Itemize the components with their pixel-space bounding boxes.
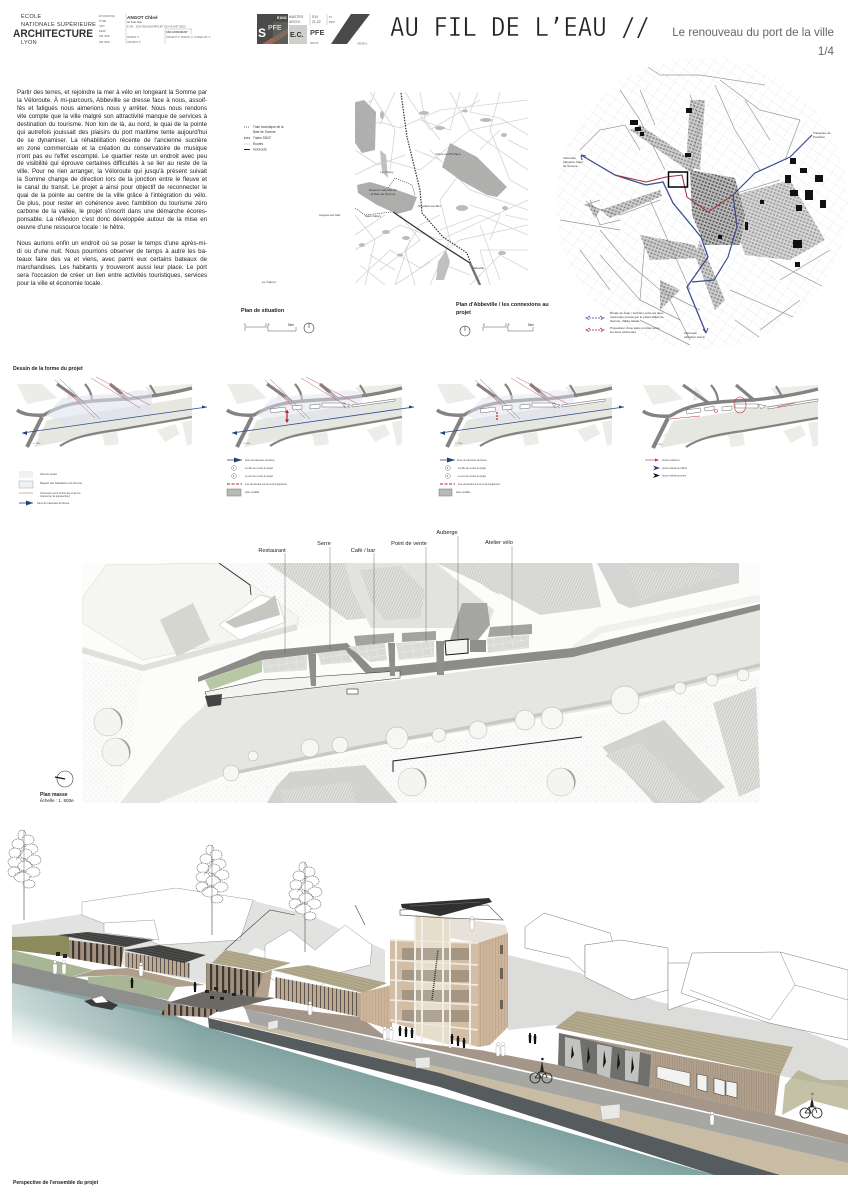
- atelier velo building: [555, 1011, 793, 1115]
- diagram 2 legend: [227, 458, 288, 496]
- white annex: [104, 920, 159, 940]
- text block: project description: teaux faire des va et viens, avec parmi eux certains bateaux de: [17, 256, 207, 263]
- header: project badge: PFE: [268, 25, 282, 32]
- path: [72, 968, 205, 987]
- header: student information: DIR./PAR: [99, 41, 110, 44]
- diagram 1 legend: Rapport des habitations à la Somme: [40, 481, 83, 485]
- plan masse labels: Auberge: [436, 530, 458, 536]
- legend: Abbeville map: Somme, Vallée Idéale.: [610, 319, 640, 323]
- text block: project description: la Véloroute. À mi-parcours, Abbeville se dresse face à nous, assoif-: [17, 97, 207, 104]
- text block: project description: la Somme change de direction lors de la jonction entre le fleuve et: [17, 176, 207, 183]
- diagram 2: 1 / 2000: [243, 443, 251, 445]
- diagram 4: [643, 385, 818, 448]
- trees: right bank path: [238, 665, 760, 772]
- header: student information: VINCENT. P, NOROS. K, CAPELLINI. N: [166, 36, 211, 39]
- pavilion 2: [124, 945, 206, 978]
- grey block: centre: [345, 563, 494, 628]
- header: project badge: 21-22: [312, 20, 321, 24]
- text block: project description: sera l'occasion de créer un lien entre activités touristiques, services: [17, 272, 207, 279]
- text block: project description: n'ont pas eu l'effet escompté. Le quartier reste un endroit avec peu: [17, 152, 207, 160]
- icon: north arrow situation: [304, 323, 314, 333]
- header: student information: DIR./PAR: [99, 35, 110, 38]
- grey terrain shadows: [12, 900, 385, 985]
- panel: situation map: Réserve naturelle de: [369, 188, 397, 192]
- diagram 1: [17, 377, 207, 447]
- diagram 1 legend: Aires du projet: [40, 472, 57, 476]
- stippled ground: [82, 563, 760, 803]
- text block: project description: quai de la pointe au centre de la ville grâce à l'intégration du vélo.: [17, 192, 207, 199]
- header: project badge: E.C.: [290, 32, 304, 39]
- subtitle: 1/4: [818, 45, 835, 58]
- panel: Abbeville map: (direction baie): [563, 160, 583, 164]
- scale bar: plan d'Abbeville: 5km: [528, 323, 534, 327]
- text block: project description: ponsable. La réflexion c'est donc développée autour de la mise en: [17, 216, 207, 223]
- diagram 1: 1 / 2000: [33, 443, 41, 445]
- diagram 3 legend: piste cyclable: [456, 491, 471, 494]
- situation map: outside labels: [262, 204, 441, 284]
- white background building: [82, 888, 253, 945]
- plan masse labels: [258, 530, 513, 654]
- planted garden: [205, 660, 262, 690]
- house C: [681, 952, 848, 1040]
- legend: situation map: [244, 125, 284, 152]
- text block: project description: qui autrefois jouissait des plaisirs du port maritime tente aujourd'hui: [17, 129, 207, 136]
- panel: Abbeville map: Véloroute: [563, 156, 576, 160]
- heading: dessin de la forme: Dessin de la forme du projet: [13, 366, 83, 372]
- text block: project description: marchandises. Les habitants y trouveront aussi leur place. Le port: [17, 264, 207, 271]
- trees: right bank: [223, 669, 749, 781]
- scale bar: plan de situation: 2,5: [265, 323, 270, 327]
- shadow: centre: [450, 603, 490, 640]
- house D roof detail: [690, 952, 848, 1020]
- legend: Abbeville map: véloroutes prévue par le projet Vallée de: [610, 315, 664, 319]
- diagram 3 legend: Le port au centre du projet: [458, 475, 486, 478]
- boat: [84, 996, 118, 1010]
- trees: lower right: [398, 768, 427, 796]
- panel: situation map: Le Crotoy: [380, 170, 394, 174]
- panel: perspective: [8, 830, 848, 1175]
- lawn 1: [12, 950, 93, 977]
- subtitle: [672, 26, 835, 58]
- header: student information: [99, 14, 211, 44]
- shadows behind the buildings: [354, 624, 532, 646]
- diagram 3 legend: 2: [447, 474, 449, 478]
- situation map: outside labels: Noyelles-sur-Mer: [418, 204, 441, 208]
- legend: Abbeville map: Ronde de l'eau / Jonction entre les deux: [610, 311, 664, 315]
- quay wall: [208, 1018, 780, 1175]
- diagram 2 legend: piste cyclable: [245, 491, 260, 494]
- wood deck: [240, 1003, 848, 1145]
- scale bar: plan de situation: 0: [244, 323, 246, 327]
- header: student information: Au fil de l'eau: [126, 21, 143, 24]
- diagram 3: 1 / 2000: [455, 443, 463, 445]
- text block: project description: destination du tourisme. Non loin de là, au nord, le quai de la pointe: [17, 121, 207, 128]
- text block: project description: [17, 89, 207, 286]
- text block: project description: en zone commerciale et la création du conservatoire de musique: [17, 145, 207, 152]
- panel: situation map: Abbeville: [472, 266, 484, 270]
- diagram 2 legend: Sens de traversée du fleuve: [245, 459, 275, 462]
- header: student information: E 041 - SOUTENANCE/PROJET DE FIN D'ÉTUDES: [127, 26, 186, 28]
- diagram 2: [227, 377, 414, 447]
- landing steps: [160, 1004, 220, 1017]
- heading: plan d'Abbeville: Plan d'Abbeville / les connexions au: [456, 302, 549, 308]
- text block: project description: Nous aurions enfin un endroit où se poser le temps d'une après-mi-: [17, 240, 207, 247]
- text block: project description: oeuvre d'une ressource locale : le hêtre.: [17, 224, 125, 231]
- plan masse labels: Serre: [317, 541, 331, 547]
- panel: Abbeville map: [556, 57, 848, 349]
- roofs: top right: [436, 563, 601, 615]
- plan masse labels: Point de vente: [391, 541, 427, 547]
- situation map: outside labels: Saint-Valery: [365, 214, 382, 218]
- house B: [585, 940, 668, 1000]
- header: project badge: MASTER: [289, 15, 304, 19]
- header: student information: ENCADREMENT: [166, 30, 188, 34]
- quay terrace: [205, 671, 400, 700]
- bottom centre block: [267, 765, 398, 803]
- header: student information: VINCENT. P: [127, 41, 141, 44]
- plan masse caption: [40, 792, 74, 803]
- legend: situation map: Baie de Somme: [253, 130, 276, 134]
- legend: Abbeville map: [586, 311, 664, 334]
- panel: Abbeville map: Véloroute: [684, 331, 697, 335]
- text block: project description: pour la ville et économie locale.: [17, 280, 102, 286]
- panel: situation map: [352, 92, 528, 285]
- text block: project description: De plus, pour rester en cohérence avec l'ambition du tourisme zéro: [17, 200, 207, 207]
- background mid houses: [265, 925, 372, 1000]
- scale bar: plan de situation: [244, 323, 296, 331]
- terrace tables: [56, 952, 243, 1000]
- header: school logo: ÉCOLE: [21, 13, 41, 20]
- plan masse labels: Atelier vélo: [485, 540, 513, 546]
- boats: [205, 694, 222, 707]
- header: project badge: FI: [329, 15, 332, 19]
- diagram 2 legend: Le port au centre du projet: [245, 475, 273, 478]
- panel: situation map: Crécy-en-Ponthieu: [435, 152, 461, 156]
- heading: plan d'Abbeville: projet: [456, 310, 471, 316]
- diagram 3: [437, 377, 624, 447]
- bottom right roofs: [605, 742, 700, 803]
- scale bar: plan d'Abbeville: 2,5: [505, 323, 510, 327]
- text block: project description: vite compte que la ville malgré son attractivité manque de services à: [17, 113, 207, 120]
- header: student information: RESP.: [99, 30, 106, 33]
- scale bar: plan d'Abbeville: 0: [483, 323, 485, 327]
- legend: situation map: Trains SNCF: [253, 136, 271, 140]
- diagram 3 legend: Axe structurant qui sert à la programme: [458, 483, 501, 486]
- heading: plan de situation: Plan de situation: [241, 308, 284, 314]
- text block: project description: le canal du transit. Le projet a ainsi pour objectif de reconnecter le: [17, 184, 207, 191]
- wall line: [393, 737, 582, 772]
- panel: situation map: la Baie de Somme: [371, 192, 396, 196]
- pavement strips: [308, 640, 486, 686]
- diagram 2 legend: La ville au centre du projet: [245, 467, 273, 470]
- text block: project description: de visibilité qui éprouve certaines difficultés à se lier au reste de la: [17, 160, 207, 167]
- situation map: outside labels: Cayeux-sur-Mer: [319, 213, 341, 217]
- header: school logo: [13, 13, 96, 46]
- lawn 2: [88, 975, 176, 1000]
- situation map: outside labels: Le Tréport: [262, 280, 276, 284]
- diagram 2 legend: Axe structurant qui sert à la programme: [245, 483, 288, 486]
- figures: [53, 916, 714, 1125]
- roof: auberge: [445, 639, 468, 655]
- diagram 4 legend: Accès extérieurs: [662, 459, 680, 462]
- roof: atelier velo: [487, 635, 529, 653]
- roof: restaurant: [262, 655, 307, 673]
- panel: Abbeville map: de Somme: [563, 164, 578, 168]
- legend: Abbeville map: les deux véloroutes: [610, 330, 636, 334]
- house small: [668, 963, 706, 1010]
- header: school logo: NATIONALE SUPÉRIEURE: [21, 21, 96, 28]
- scale bar: plan d'Abbeville: [483, 323, 534, 331]
- header: project badge: ©ENSAL: [357, 42, 368, 46]
- text block: project description: di ou d'une nuit. Nous pourrions observer de temps à autre les ba-: [17, 248, 207, 255]
- plan masse caption: Plan masse: [40, 792, 68, 798]
- diagram 3 legend: La ville au centre du projet: [458, 467, 486, 470]
- subtitle: Le renouveau du port de la ville: [672, 26, 834, 39]
- diagram 3 legend: 1: [447, 466, 449, 470]
- bank road: [570, 598, 760, 652]
- header: project badge: E1041: [277, 16, 287, 20]
- timber entry frame: [360, 985, 392, 1030]
- header: student information: ÉTUDIANT(E): [99, 15, 115, 18]
- water: [12, 983, 714, 1175]
- heading: plan d'Abbeville: [456, 302, 549, 316]
- left bank wall: [12, 961, 209, 1018]
- trees: left bank: [94, 708, 123, 736]
- right plants: [782, 1070, 848, 1115]
- panel: Abbeville map: Ponthieu: [813, 135, 825, 139]
- header: project badge: SOUT: [310, 41, 319, 45]
- header: project badge: ARCHI: [289, 20, 300, 24]
- block: far top right: [597, 563, 739, 608]
- roof: top-left court: [219, 595, 285, 640]
- plan masse caption: échelle : 1. 500e: [40, 798, 74, 803]
- pavilion 1: [58, 932, 154, 967]
- header: student information: TITRE: [99, 20, 107, 23]
- header: project badge: [257, 14, 370, 46]
- trees: [8, 830, 41, 920]
- title: AU FIL DE L’EAU //: [390, 13, 650, 43]
- icon: north arrow Abbeville: [460, 326, 470, 336]
- roofs: centre: [360, 566, 425, 620]
- roofs: detail top right: [455, 566, 595, 610]
- grey mass: top left: [160, 603, 210, 657]
- diagram 4 legend: Accès intérieurs publics: [662, 467, 688, 470]
- header: project badge: S: [258, 26, 266, 40]
- text block: project description: ville. Pour ne rien arranger, la Véloroute qui jusqu'à présent suivait: [17, 168, 207, 175]
- diagram 1 legend: Connexion vers la Somme et la rue: [40, 491, 81, 495]
- bottom right block 2: [713, 687, 760, 797]
- icon: north arrow plan masse: [55, 771, 73, 787]
- bench: [268, 1020, 620, 1120]
- legend: situation map: Véloroute: [253, 148, 267, 152]
- diagram 2 legend: 2: [233, 474, 235, 478]
- planted area: [12, 935, 69, 957]
- header: student information: ANGOT Chloé: [127, 15, 158, 20]
- edge line: [219, 563, 251, 595]
- text block: project description: de se dynamiser. La réhabilitation récente de l'ancienne sucrière: [17, 137, 207, 144]
- diagram 3 legend: [439, 458, 501, 496]
- roof: serre: [318, 650, 353, 665]
- point de vente pavilion: [272, 965, 387, 1017]
- header: project badge: PFE: [310, 28, 324, 37]
- header: school logo: ARCHITECTURE: [13, 28, 93, 40]
- perspective caption: Perspective de l'ensemble du projet: [13, 1180, 98, 1186]
- tower: [390, 898, 508, 1048]
- plan masse labels: Restaurant: [258, 548, 286, 554]
- legend: situation map: Routes: [253, 142, 264, 146]
- building: top left: [82, 563, 299, 660]
- header: student information: NOROS. K: [127, 36, 140, 39]
- house A: [525, 913, 613, 973]
- diagram 4: 1 / 2000: [655, 444, 663, 446]
- scale bar: plan de situation: 5km: [288, 323, 294, 327]
- bike: cyclist: [530, 1058, 552, 1083]
- street band: [82, 627, 297, 668]
- legend: situation map: Train touristique de la: [253, 125, 284, 129]
- diagram 1 legend: [19, 471, 83, 506]
- right shadow band: [508, 955, 848, 1088]
- cafe pavilion: [206, 950, 291, 998]
- roof: point de vente: [396, 641, 434, 660]
- diagram 1 legend: Sens de traversée du fleuve: [37, 501, 70, 505]
- diagram 4 legend: [645, 458, 688, 478]
- sand quay: [208, 1017, 848, 1175]
- bottom centre roof: [280, 782, 356, 803]
- header: student information: UNIT: [99, 25, 105, 28]
- river: [120, 610, 760, 803]
- shadow: top-left court: [225, 595, 280, 628]
- text block: project description: fés et fatigués nous aimerions nous y arrêter. Nous nous rendons: [17, 105, 207, 112]
- gradient slope line: [225, 905, 365, 950]
- panel: Abbeville map: Traversée de: [813, 131, 831, 135]
- header: project badge: S10: [312, 15, 318, 19]
- diagram 3 legend: Sens de traversée du fleuve: [457, 459, 487, 462]
- panel: Abbeville map: (direction Ham): [684, 335, 705, 339]
- text block: project description: carbone de la vallée, le projet s'inscrit dans une démarche écores-: [17, 208, 207, 215]
- bike: right: [800, 1093, 822, 1118]
- plan masse labels: Café / bar: [351, 548, 375, 554]
- header: school logo: LYON: [21, 40, 37, 46]
- quay dark band: [198, 604, 760, 682]
- panel: plan masse: [82, 563, 760, 803]
- diagram 1 legend: (conserver la perspective): [40, 494, 70, 498]
- roofs: middle block: [267, 563, 371, 620]
- diagram 4 legend: Accès intérieurs privés: [662, 474, 687, 478]
- terrace: [170, 990, 275, 1012]
- roof: cafe: [348, 643, 387, 662]
- legend: Abbeville map: Proposition d'une autre jonction entre: [610, 326, 660, 330]
- water fade at left: [12, 983, 209, 1110]
- gravel: [245, 1009, 848, 1163]
- roofs: far top right: [625, 565, 725, 600]
- header: project badge: PPC: [329, 20, 336, 24]
- text block: project description: Partir des terres, et rejoindre la mer à vélo en longeant la Somme par: [17, 89, 207, 96]
- bottom right block 1: [602, 720, 725, 803]
- diagram 2 legend: 1: [233, 466, 235, 470]
